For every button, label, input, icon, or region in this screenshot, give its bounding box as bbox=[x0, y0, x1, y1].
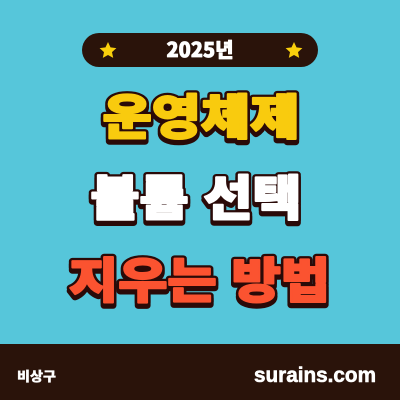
headline line 2: 볼륨 선택 bbox=[90, 159, 302, 229]
headline line 3: 지우는 방법 bbox=[69, 242, 330, 312]
footer bar bbox=[0, 344, 400, 400]
top pill banner bbox=[82, 33, 318, 67]
headline line 1: 운영체제 bbox=[102, 78, 300, 148]
headline line 2: 볼륨 선택 bbox=[90, 162, 302, 232]
banner year text: 2025년 bbox=[166, 34, 234, 63]
headline line 2: 볼륨 선택 bbox=[90, 159, 302, 229]
icon: left star bbox=[100, 42, 116, 58]
headline line 1: 운영체제 bbox=[102, 81, 300, 151]
footer site url: surains.com bbox=[254, 364, 376, 387]
headline line 3: 지우는 방법 bbox=[69, 244, 330, 314]
footer left label: 비상구 bbox=[17, 366, 56, 385]
icon: right star bbox=[286, 42, 302, 58]
headline line 3: 지우는 방법 bbox=[69, 242, 330, 312]
headline line 1: 운영체제 bbox=[102, 78, 300, 148]
